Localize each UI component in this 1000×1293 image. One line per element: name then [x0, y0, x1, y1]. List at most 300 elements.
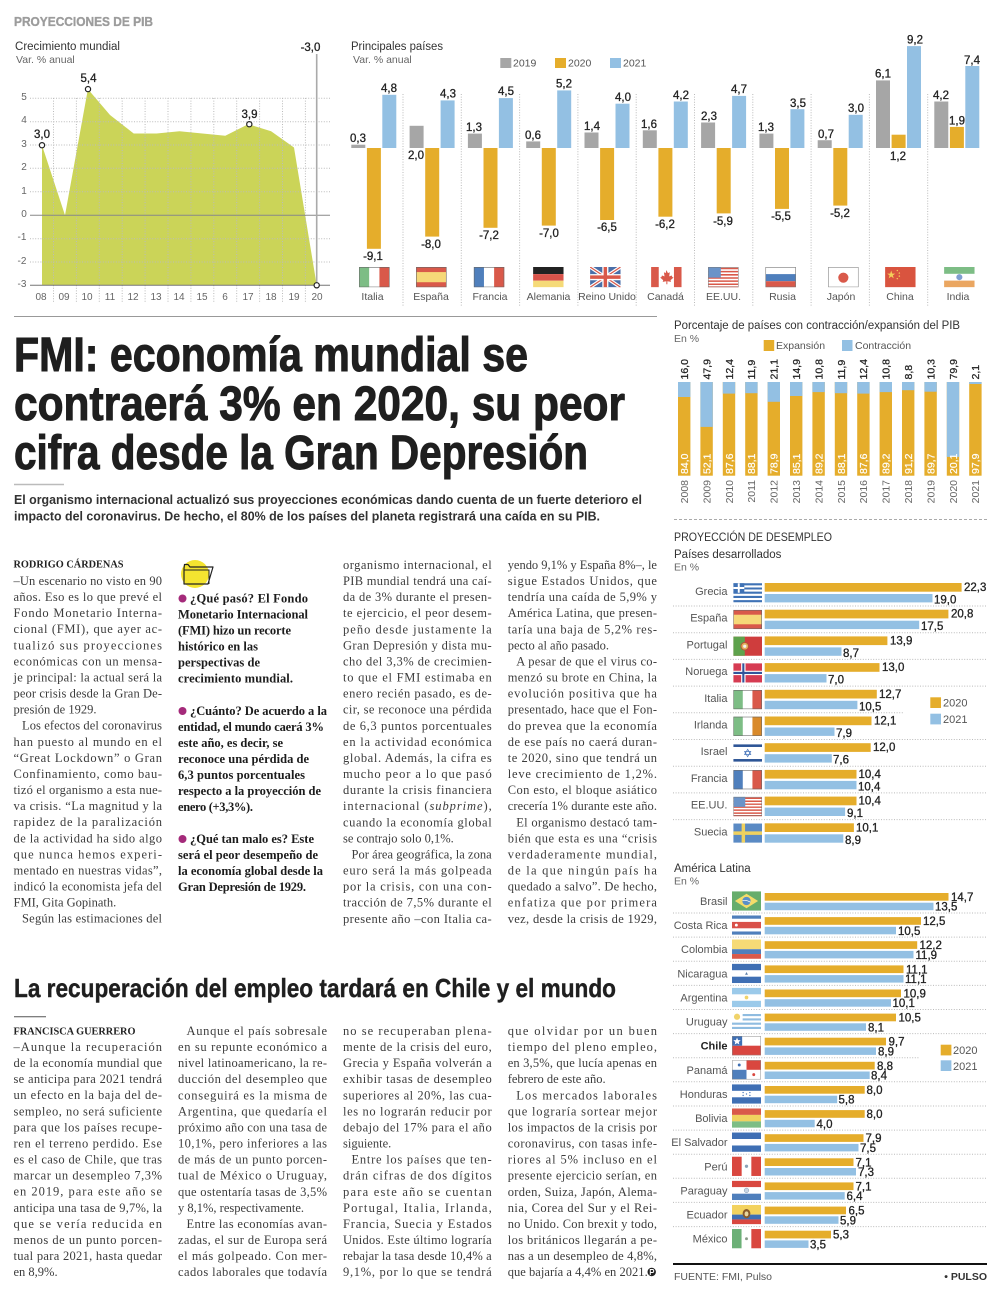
bar values: -7,0 — [539, 228, 559, 240]
article column 4: do prevea que la economía — [508, 719, 657, 733]
article column 3: presente año –con Italia ca- — [343, 912, 492, 926]
article column 4: enfatiza que por primera — [508, 896, 657, 910]
contraction values: 14,9 — [791, 359, 803, 380]
second article column 4: que bajaría a 4,4% en 2021. — [508, 1265, 648, 1279]
article column 4: menzó su brote en China, la — [508, 671, 657, 685]
second article column 3: drán cifras de dos dígitos — [343, 1169, 492, 1183]
bar values: 8,9 — [845, 835, 861, 847]
subheadline — [14, 492, 642, 524]
chart subtitle: América Latina — [674, 863, 751, 875]
year labels: 2015 — [836, 480, 848, 503]
bars 2021 — [765, 903, 934, 1248]
year labels: 2016 — [858, 480, 870, 503]
bar values: 12,1 — [874, 716, 896, 728]
bar values: 13,0 — [882, 662, 904, 674]
second article column 2: el más golpeado. Con mer- — [178, 1249, 327, 1263]
bar values: 20,8 — [951, 609, 973, 621]
bar values: 8,4 — [871, 1070, 888, 1082]
second article column 1: –Aunque la recuperación — [12, 1040, 163, 1054]
article column 4: verdaderamente mundial, — [508, 847, 657, 861]
expansion values: 87,6 — [858, 453, 870, 474]
question 3: la economía global desde la — [178, 864, 324, 878]
flags and country names — [359, 267, 975, 303]
chart: principales países — [350, 34, 981, 306]
second article column 3 — [343, 1024, 493, 1279]
chart title: Crecimiento mundial — [15, 41, 120, 53]
bar values: 4,2 — [673, 90, 689, 102]
bar values: 8,7 — [843, 648, 859, 660]
second article column 3: Portugal, Italia, Irlanda, — [343, 1201, 492, 1215]
year labels: 2019 — [925, 480, 937, 503]
legend: 2019 — [513, 58, 537, 70]
bar values: 10,5 — [898, 926, 920, 938]
bar values: 12,5 — [923, 916, 945, 928]
second article column 2: Argentina, que quedaría el — [178, 1104, 328, 1118]
bar values: 4,0 — [615, 92, 631, 104]
year labels: 2009 — [701, 480, 713, 503]
question 2: 6,3 puntos porcentuales — [178, 768, 305, 782]
question 3: Gran Depresión de 1929. — [178, 880, 306, 894]
bar values: 7,4 — [964, 55, 981, 67]
bar values: 4,8 — [381, 83, 397, 95]
country labels: Irlanda — [694, 720, 728, 732]
second article column 2: y 8,1%, respectivamente. — [178, 1201, 304, 1215]
expansion values: 52,1 — [701, 453, 713, 474]
article column 3: cir, se reconoce una pérdida — [343, 703, 492, 717]
article column 3: por la crisis, con una con- — [343, 880, 492, 894]
second article column 2: zadas, el sur de Europa será — [178, 1233, 327, 1247]
y axis labels: 3 — [21, 139, 27, 150]
second article column 3: para este año se cuentan — [343, 1185, 492, 1199]
article column 1: indicó la economista jefa del — [14, 880, 163, 894]
year labels: 2010 — [724, 480, 736, 503]
article column 4: evolución positiva que ha — [508, 687, 657, 701]
bar values: -5,9 — [713, 216, 733, 228]
article column 3: euro será la más golpeada — [343, 864, 492, 878]
article column 1: tizó el organismo a esta nue- — [14, 783, 162, 797]
legend — [930, 697, 967, 726]
country labels: Italia — [704, 693, 728, 705]
expansion values: 88,1 — [836, 453, 848, 474]
bar values: -5,5 — [771, 211, 791, 223]
article column 4: A pesar de que el virus co- — [516, 654, 657, 668]
article column 3: peño desde justamente la — [343, 622, 492, 636]
second article column 2: en su repunte económico a — [178, 1040, 327, 1054]
article column 1: va crisis. “La magnitud y la — [14, 799, 162, 813]
article column 3: tracción de 7,5% durante el — [343, 896, 492, 910]
year labels: 2021 — [970, 480, 982, 503]
second article column 4: tiempo del pleno empleo, — [508, 1040, 657, 1054]
expansion values: 89,7 — [925, 453, 937, 474]
bar values: 10,4 — [858, 781, 881, 793]
legend: 2021 — [943, 714, 967, 726]
article column 1: que nunca hemos experi- — [14, 847, 162, 861]
x axis labels: 17 — [242, 292, 254, 303]
second article column 3: Entre los países que ten- — [352, 1153, 492, 1167]
main headline: cifra desde la Gran Depresión — [14, 427, 588, 480]
source note: FUENTE: FMI, Pulso — [674, 1271, 772, 1283]
article column 4: Con esto, el bloque asiático — [508, 783, 657, 797]
year labels: 2012 — [769, 480, 781, 503]
bar values: 10,1 — [892, 998, 915, 1010]
bar values: -7,2 — [479, 230, 499, 242]
main headline: contraerá 3% en 2020, su peor — [14, 378, 625, 431]
country labels: Argentina — [680, 992, 728, 1004]
legend: 2021 — [953, 1061, 977, 1073]
second headline: La recuperación del empleo tardará en Chile y el mundo — [14, 973, 616, 1003]
contraction values: 10,8 — [813, 359, 825, 380]
second article column 3: no se recuperaban plena- — [343, 1024, 492, 1038]
sidebar: key questions — [178, 560, 328, 894]
article column 4: taría una baja de 5,2% res- — [508, 622, 657, 636]
bar values: 4,5 — [498, 86, 514, 98]
bar values: 0,3 — [350, 133, 366, 145]
article column 1: Los efectos del coronavirus — [22, 719, 162, 733]
year labels: 2008 — [679, 480, 691, 503]
article column 1: Según las estimaciones del — [22, 912, 163, 926]
data values: -3,0 — [301, 42, 320, 54]
country labels: Perú — [704, 1161, 728, 1173]
article column 3: Gran Depresión y dista mu- — [343, 638, 492, 652]
flags and country names: EE.UU. — [706, 291, 741, 303]
contraction bars — [678, 382, 982, 457]
bar values: -9,1 — [363, 251, 383, 263]
second article column 3: Francia, Suecia y Estados — [343, 1217, 492, 1231]
second article column 2 — [178, 1024, 328, 1279]
section heading: proyecciones de PIB: PROYECCIONES DE PIB — [14, 14, 153, 29]
byline: FRANCISCA GUERRERO — [14, 1026, 136, 1038]
country labels: Francia — [691, 773, 728, 785]
expansion bars — [678, 382, 982, 476]
second article column 1: anticipa una tasa de 9,7%, la — [14, 1201, 162, 1215]
question 1: Monetario Internacional — [178, 608, 309, 622]
second article column 2: Entre las economías avan- — [186, 1217, 327, 1231]
chart unit: Var. % anual — [353, 54, 412, 66]
country labels: Brasil — [700, 896, 728, 908]
year labels: 2011 — [746, 480, 758, 503]
article column 4: bién que esta es una “crisis — [508, 831, 657, 845]
bar values — [810, 892, 973, 1251]
bar values: 12,7 — [879, 689, 901, 701]
data values — [34, 42, 320, 141]
bar values: 3,5 — [790, 98, 806, 110]
bar values: 5,8 — [838, 1095, 854, 1107]
bar values: 10,5 — [859, 701, 881, 713]
subheadline: El organismo internacional actualizó sus proyecciones económicas dando cuenta de un fuerte deterioro el — [14, 492, 642, 507]
question 2: respecto a la proyección de — [178, 784, 321, 798]
second article column 2: 10,1%, pero inferiores a las — [178, 1137, 327, 1151]
flags — [733, 583, 762, 843]
bar values: 1,2 — [890, 151, 906, 163]
question 3: ¿Qué tan malo es? Este — [190, 832, 314, 846]
bar values: 7,9 — [836, 728, 852, 740]
country labels — [671, 896, 728, 1246]
country labels: Costa Rica — [674, 920, 728, 932]
chart: desempleo, América Latina — [671, 863, 987, 1251]
second article column 4: presente ejercicio serían, en — [508, 1169, 658, 1183]
second article column 4: riores al 5% incluso en el — [508, 1153, 658, 1167]
question 2 — [178, 704, 328, 814]
country labels: El Salvador — [671, 1137, 728, 1149]
year labels: 2013 — [791, 480, 803, 503]
country labels: Panamá — [687, 1065, 728, 1077]
article column 4: tendría una caída de 5,9% y — [508, 590, 658, 604]
country labels: Colombia — [681, 944, 728, 956]
question 1: histórico en las — [178, 640, 258, 654]
bar values: 22,3 — [964, 582, 986, 594]
article column 4: yendo 9,1% y España 8%–, le — [508, 558, 657, 572]
country labels: Suecia — [694, 826, 728, 838]
bar values: 13,5 — [935, 902, 957, 914]
question 1: ¿Qué pasó? El Fondo — [190, 592, 308, 606]
bars 2021 — [765, 594, 932, 843]
legend — [941, 1045, 977, 1073]
question 1: perspectivas de — [178, 656, 260, 670]
contraction values: 12,4 — [858, 359, 870, 380]
country labels — [685, 586, 728, 838]
article column 4: crecería 1% durante este año. — [508, 799, 657, 813]
article column 1: de la actividad ha sido algo — [14, 831, 162, 845]
bar values: 10,4 — [858, 769, 881, 781]
bar values: 7,0 — [828, 675, 844, 687]
second article column 2: Aunque el país sobresale — [186, 1024, 327, 1038]
bar values: 7,5 — [860, 1143, 876, 1155]
expansion values: 20,1 — [948, 453, 960, 474]
bar values: 11,9 — [916, 950, 937, 962]
bar values: 4,2 — [933, 90, 949, 102]
legend: Contracción — [855, 340, 911, 352]
country labels: Uruguay — [686, 1017, 728, 1029]
bar values: 4,7 — [731, 84, 747, 96]
flags and country names: China — [886, 291, 914, 303]
article column 4: pecto al año pasado. — [508, 638, 609, 652]
x axis labels: 09 — [58, 292, 70, 303]
question 2: entidad, el mundo caerá 3% — [178, 720, 324, 734]
flags and country names: Japón — [827, 291, 855, 303]
second article column 1 — [12, 1026, 163, 1279]
article column 3: durante la crisis financiera — [343, 783, 492, 797]
country labels: Israel — [701, 746, 728, 758]
publication credit: • PULSO — [944, 1271, 987, 1283]
x axis labels: 6 — [222, 292, 228, 303]
chart: porcentaje de países con contracción / expansión — [674, 320, 982, 503]
article column 3: enero recién pasado, es de- — [343, 687, 492, 701]
second article column 2: conseguirá es la misma de — [178, 1088, 327, 1102]
bars 2020 — [367, 127, 964, 249]
bar values: 0,6 — [525, 130, 541, 142]
question 1 — [178, 592, 309, 686]
bar values: 1,4 — [584, 121, 601, 133]
legend: 2020 — [568, 58, 592, 70]
contraction values — [679, 359, 982, 380]
area series — [42, 89, 317, 285]
question 1: crecimiento mundial. — [178, 672, 293, 686]
contraction values: 11,9 — [746, 360, 758, 380]
second article column 3: Grecia y España volverán a — [343, 1056, 492, 1070]
second article column 2: nivel latinoamericano, la re- — [178, 1056, 327, 1070]
second article column 4: los británicos llegarán a pe- — [508, 1233, 657, 1247]
second article column 3: Unidos. Este último lograría — [343, 1233, 492, 1247]
bar values: 6,4 — [846, 1191, 863, 1203]
contraction values: 47,9 — [701, 359, 713, 380]
second article column 4: febrero de este año. — [508, 1072, 606, 1086]
article column 1: Fondo Monetario Interna- — [14, 606, 162, 620]
second article column 1: en 2019, para este año se — [14, 1185, 162, 1199]
year labels — [679, 480, 982, 503]
second article column 3: mente de la crisis del euro, — [343, 1040, 492, 1054]
bar values: 8,0 — [866, 1109, 882, 1121]
article column 1 — [12, 558, 163, 926]
article column 3 — [343, 558, 492, 926]
article column 4: presentado, hace que el Fon- — [508, 703, 657, 717]
article column 1: años. Eso es lo que prevé el — [14, 590, 163, 604]
flags and country names: Rusia — [769, 291, 796, 303]
article column 4: sigue Estados Unidos, que — [508, 574, 657, 588]
bar values: 7,1 — [856, 1157, 872, 1169]
article column 3: se contrajo solo 0,1%. — [343, 831, 454, 845]
bar values: 12,2 — [920, 940, 942, 952]
second article column 1: que se vería reducida en — [14, 1217, 163, 1231]
expansion values: 89,2 — [813, 453, 825, 474]
article column 3: cuando la economía global — [343, 815, 492, 829]
contraction values: 8,8 — [903, 365, 915, 380]
contraction values: 10,8 — [881, 359, 893, 380]
second article column 4: Los mercados laborales — [516, 1088, 657, 1102]
y axis labels: 5 — [21, 92, 27, 103]
legend: 2020 — [943, 698, 967, 710]
second article column 4 — [508, 1024, 658, 1279]
bar values: 4,3 — [440, 88, 456, 100]
second article column 1: ren el terreno perdido. Ese — [14, 1136, 162, 1150]
bar values — [350, 34, 981, 263]
x axis labels: 14 — [173, 292, 185, 303]
second article column 2: tual de México o Uruguay, — [178, 1169, 327, 1183]
second article column 4: orden, Suiza, Japón, Alema- — [508, 1185, 657, 1199]
bar values: 0,7 — [818, 129, 834, 141]
y axis labels: 1 — [21, 186, 27, 197]
second article column 2: próximo año con una tasa de — [178, 1120, 327, 1134]
chart subtitle: Países desarrollados — [674, 549, 782, 561]
bar values: -8,0 — [421, 239, 441, 251]
flags and country names: España — [413, 291, 449, 303]
main headline — [14, 329, 625, 480]
country labels: España — [690, 613, 728, 625]
article column 3: en la actividad económica — [343, 735, 492, 749]
expansion values: 87,6 — [724, 453, 736, 474]
bar values: 10,5 — [898, 1013, 921, 1025]
expansion values: 97,9 — [970, 453, 982, 474]
second article column 2: de más de un punto porcen- — [178, 1153, 327, 1167]
question 2: ¿Cuánto? De acuerdo a la — [190, 704, 328, 718]
bar values: 2,3 — [701, 111, 717, 123]
chart: crecimiento mundial — [15, 41, 330, 303]
bar values: 14,7 — [951, 892, 973, 904]
article column 3: organismo internacional, el — [343, 558, 492, 572]
main headline: FMI: economía mundial se — [14, 329, 528, 382]
second article column 4: los impactos de la crisis por — [508, 1120, 658, 1134]
article column 3: PIB mundial tendrá una caí- — [343, 574, 492, 588]
article column 1: rapidez de la paralización — [14, 815, 163, 829]
bar values: 3,5 — [810, 1239, 826, 1251]
x axis labels: 13 — [150, 292, 162, 303]
second article column 1: un efecto en la baja del de- — [14, 1088, 162, 1102]
second article column 4: en 3,5%, que lucía apenas en — [508, 1056, 658, 1070]
bar values: 1,3 — [466, 122, 482, 134]
contraction values: 10,3 — [925, 359, 937, 380]
chart unit: En % — [674, 333, 699, 345]
article column 3: global. Además, la cifra es — [343, 751, 492, 765]
article column 1: tualizó sus proyecciones — [14, 638, 162, 652]
bar values: 5,9 — [840, 1215, 856, 1227]
article column 4: de ese país no caerá duran- — [508, 735, 657, 749]
bar values: 10,1 — [856, 822, 878, 834]
bar values: 2,0 — [408, 150, 424, 162]
second article column 1: es el caso de Chile, que tras — [14, 1153, 162, 1167]
second article column 4: que lograría sortear mejor — [508, 1104, 658, 1118]
bar values: 4,0 — [816, 1119, 832, 1131]
second article column 4: coronavirus, con tasas infe- — [508, 1137, 657, 1151]
article column 3: to que el FMI estimaba en — [343, 671, 492, 685]
second article column 3: 9,1%, por lo que se tendrá — [343, 1265, 492, 1279]
second article column 3: siguiente. — [343, 1137, 391, 1151]
chart unit: En % — [674, 876, 699, 888]
question 1: (FMI) hizo un recorte — [178, 624, 291, 638]
year labels: 2018 — [903, 480, 915, 503]
second article column 2: cados laborales que todavía — [178, 1265, 327, 1279]
bar values: 9,7 — [888, 1037, 904, 1049]
second article column 1: se anticipa para 2021 tendrá — [14, 1072, 162, 1086]
data points — [39, 86, 319, 288]
x axis labels: 19 — [288, 292, 300, 303]
article column 1: FMI, Gita Gopinath. — [14, 896, 116, 910]
country labels: Noruega — [685, 666, 728, 678]
article column 4 — [508, 558, 658, 926]
country labels: Portugal — [687, 639, 728, 651]
bars 2020 — [765, 583, 962, 832]
second article column 3: debajo del 17% para el año — [343, 1120, 492, 1134]
second article column 1: menos de un punto porcen- — [14, 1233, 162, 1247]
x axis labels — [35, 292, 323, 303]
year labels: 2017 — [881, 480, 893, 503]
legend — [764, 340, 911, 352]
country labels: Paraguay — [680, 1185, 728, 1197]
bar values: 11,1 — [905, 974, 927, 986]
contraction values: 79,9 — [948, 359, 960, 380]
data values: 3,9 — [242, 109, 258, 121]
bar values: -6,2 — [655, 219, 675, 231]
legend: 2021 — [623, 58, 647, 70]
section title: PROYECCIÓN DE DESEMPLEO — [674, 531, 832, 544]
x axis labels: 12 — [127, 292, 139, 303]
question 2: este año, es decir, se — [178, 736, 283, 750]
bar values: -5,2 — [830, 208, 850, 220]
article column 1: –Un escenario no visto en 90 — [12, 574, 162, 588]
y axis labels — [18, 92, 27, 290]
bar values: 7,9 — [866, 1133, 882, 1145]
second article column 2: ducción del desempleo que — [178, 1072, 327, 1086]
bar values: 7,1 — [856, 1181, 872, 1193]
flags and country names: Canadá — [647, 291, 684, 303]
bar values: 5,2 — [556, 78, 572, 90]
bar values: 7,3 — [858, 1167, 874, 1179]
contraction values: 11,9 — [836, 360, 848, 380]
x axis labels: 08 — [35, 292, 47, 303]
article column 3: cho del 3,3% de crecimien- — [343, 654, 492, 668]
subheadline: impacto del coronavirus. De hecho, el 80% de los países del planeta registrará una caída en su PIB. — [14, 508, 600, 524]
year labels: 2014 — [813, 480, 825, 503]
bar values: 10,9 — [904, 988, 926, 1000]
country labels: EE.UU. — [691, 800, 728, 812]
